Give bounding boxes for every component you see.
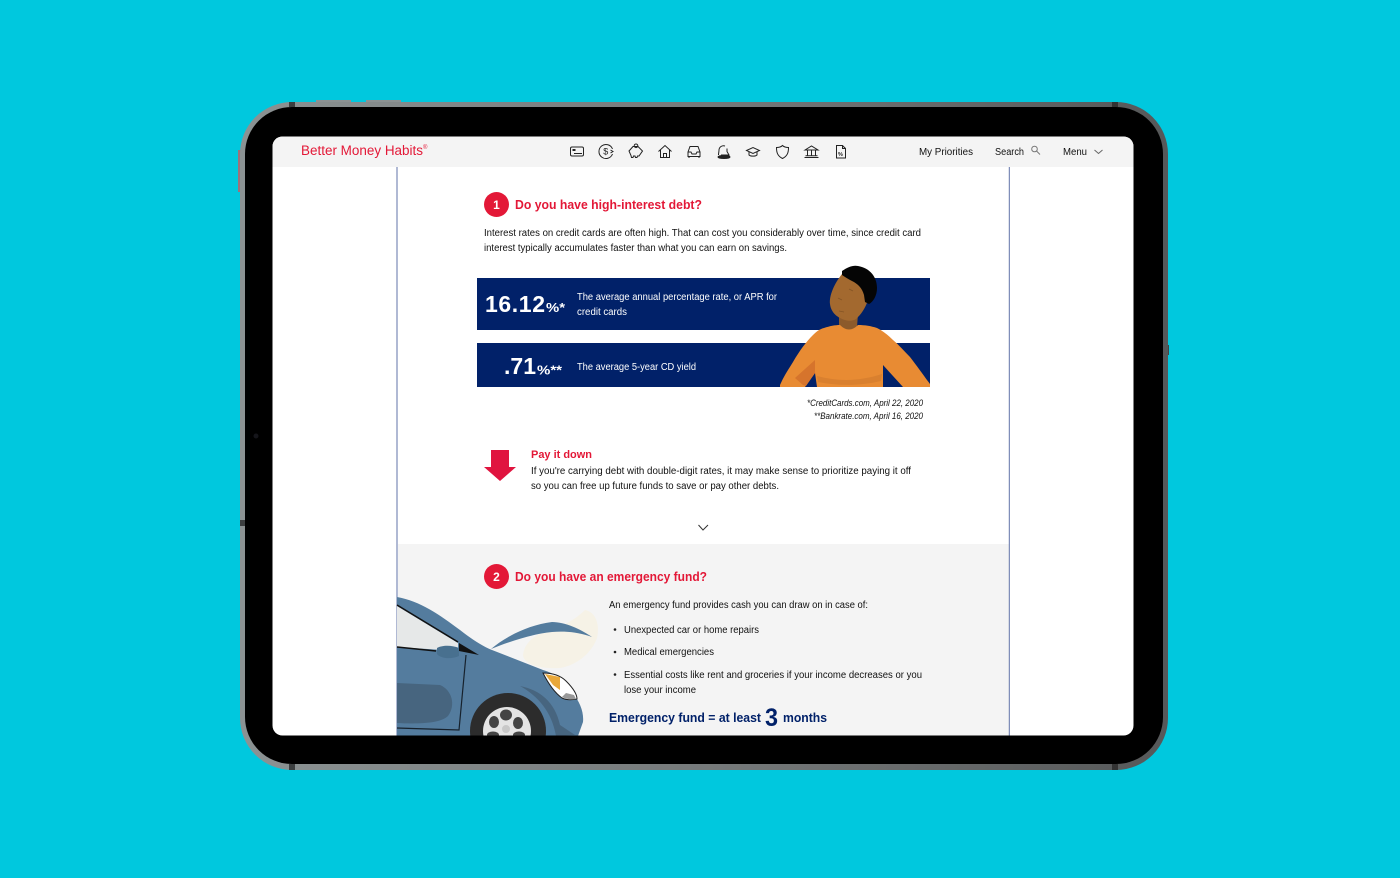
emergency fund rule: months [783,711,827,725]
tablet screen [272,136,1134,769]
navigation bar: ® [423,144,428,151]
nav icon: piggy bank [629,144,642,158]
stat bar: CD yield: %** [537,362,563,378]
stat bar: CD yield: The average 5-year CD yield [577,362,696,373]
bullet list: lose your income [624,685,696,696]
stat bar: credit card APR [477,278,930,330]
window [397,606,458,651]
section 2 heading [484,564,707,589]
illustration: person [780,266,930,387]
emergency fund rule [609,704,827,732]
wheel [470,693,546,736]
nav icon: tax document: % [838,152,843,158]
smoke [523,610,598,668]
nav icon: graduation cap [746,148,760,156]
bullet list [614,625,922,696]
open hood [491,622,592,649]
car body [397,597,583,736]
section 2 background [398,544,1009,736]
icon: search [1032,146,1040,154]
nav icon: dollar cycle: $ [603,146,608,156]
nav icon: tax document [836,146,846,158]
icon: red down arrow [484,450,516,481]
footnotes [807,398,923,421]
section 1 heading: Do you have high-interest debt? [515,198,702,212]
section 2 text: An emergency fund provides cash you can draw on in case of: [609,600,868,611]
logo wordmark: Better Money Habits [301,143,423,158]
stat bar: credit card APR: The average annual percentage rate, or APR for [577,292,778,303]
section 1 intro text [484,228,921,254]
footnotes: *CreditCards.com, April 22, 2020 [807,398,923,408]
callout: pay it down: so you can free up future funds to save or pay other debts. [531,481,779,492]
navigation bar [272,136,1134,167]
icon: scroll chevron [698,525,708,530]
content column left rule [396,167,398,736]
bullet list: Unexpected car or home repairs [624,625,759,636]
tablet frame [238,100,1169,770]
front crease [520,686,575,736]
section 1 heading [484,192,702,217]
section 2 heading: 2 [493,570,500,584]
footnotes: **Bankrate.com, April 16, 2020 [814,411,923,421]
emergency fund rule: 3 [765,704,778,732]
stat bar: credit card APR: 16.12 [485,291,545,317]
icon: menu chevron [1094,150,1102,154]
navigation bar: Search [995,147,1024,158]
nav icon: bank [804,146,818,158]
bullet list: Essential costs like rent and groceries if your income decreases or you [624,670,922,681]
stat bar: credit card APR: %* [546,300,566,315]
bullet list: Medical emergencies [624,647,714,658]
section 1 heading: 1 [493,198,500,212]
callout: pay it down: If you're carrying debt with double-digit rates, it may make sense to prioritize paying it off [531,466,911,477]
nav icon: shield [776,146,788,158]
nav links: My Priorities [919,147,973,158]
emergency fund rule: Emergency fund = at least [609,711,762,725]
stat bar: credit card APR: credit cards [577,307,627,318]
stat bar: CD yield: .71 [504,353,536,379]
door details [397,655,466,730]
nav icon: bell [718,146,730,158]
mirror [437,646,459,658]
nav icon: house [658,146,672,158]
stat bar: CD yield [477,343,930,387]
headlight [543,673,577,700]
nav icon: dollar cycle [599,145,613,158]
navigation bar: Menu [1063,147,1087,158]
callout: pay it down: Pay it down [531,449,592,461]
callout: pay it down [531,449,911,492]
section 2 text [609,600,922,696]
nav icon: credit card [570,147,584,156]
section 2 heading: Do you have an emergency fund? [515,570,707,584]
section 1 intro text: interest typically accumulates faster than what you can earn on savings. [484,243,787,254]
illustration: car with smoke [396,597,598,736]
content column right rule [1009,167,1010,736]
section 1 intro text: Interest rates on credit cards are often high. That can cost you considerably over time, since credit card [484,228,921,239]
nav icon: car [688,146,700,158]
